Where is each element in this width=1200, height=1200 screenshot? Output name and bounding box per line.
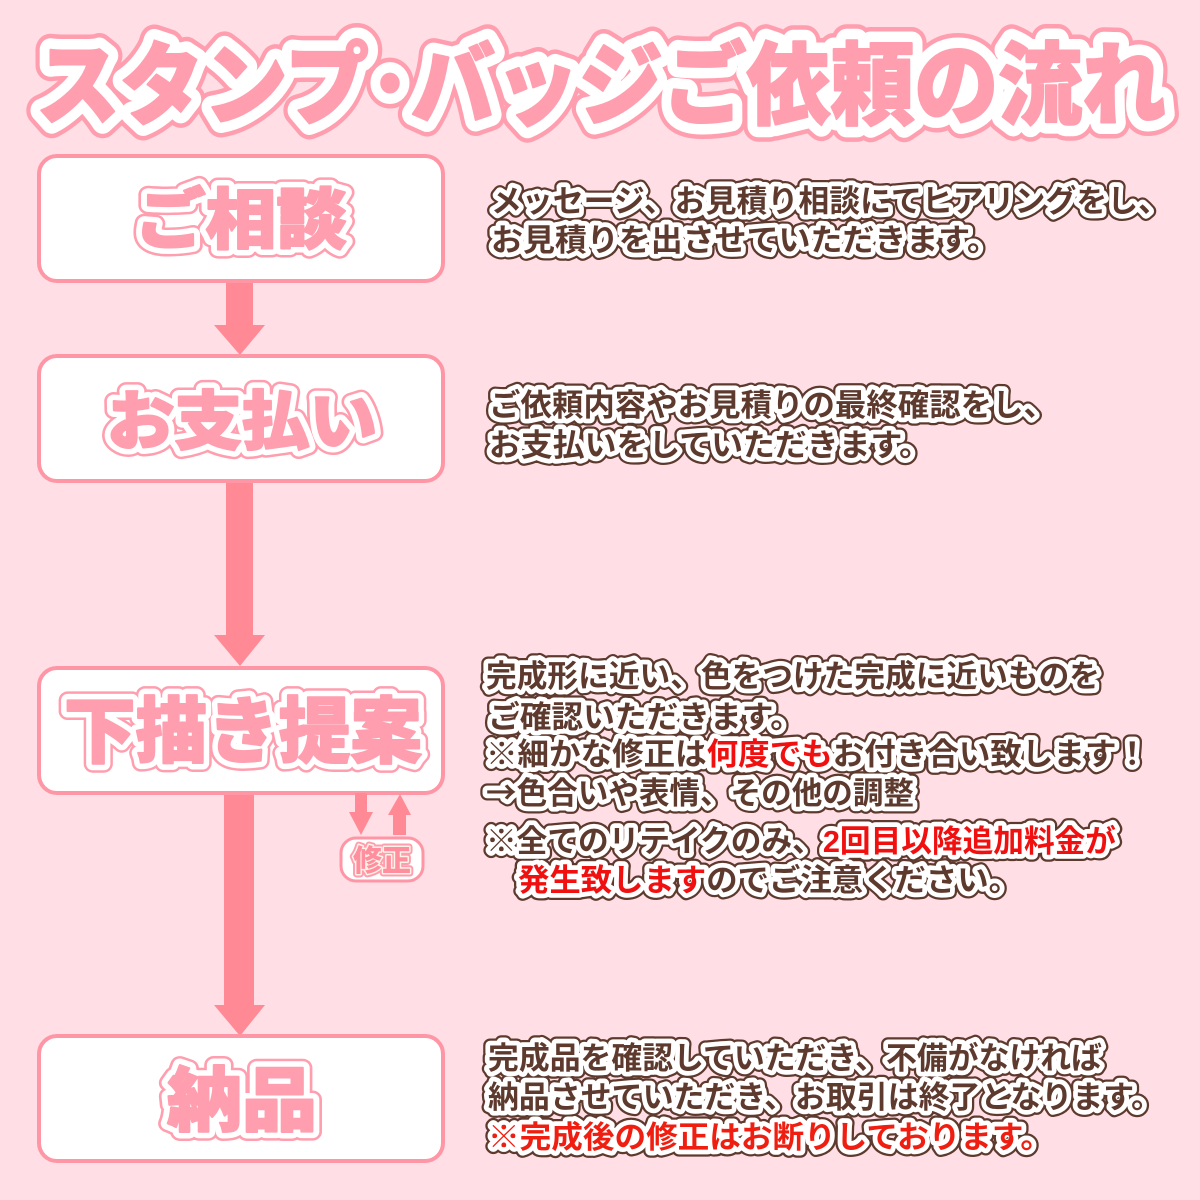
description: step 1: お見積りを出させていただきます。 (491, 223, 999, 258)
description: step 3: 発生致しますのでご注意ください。 (518, 863, 1020, 898)
description: step 4: 納品させていただき、お取引は終了となります。 (488, 1080, 1162, 1115)
revision label: 修正 (353, 845, 411, 878)
step 2 box: お支払い (39, 356, 443, 481)
step 1 box: ご相談 (39, 156, 443, 281)
arrow: down to revision (349, 793, 373, 835)
description: step 1: メッセージ、お見積り相談にてヒアリングをし、 (491, 184, 1169, 219)
step 1 label: ご相談 (135, 183, 347, 257)
revision badge: 修正 (341, 838, 423, 881)
description: step 2: お支払いをしていただきます。 (489, 428, 931, 463)
step 1 label: ご相談 (135, 183, 347, 257)
step 1 label: ご相談 (135, 183, 347, 257)
step 3 label: 下描き提案 (64, 693, 422, 773)
description: step 4: ※完成後の修正はお断りしております。 (488, 1120, 1052, 1155)
arrow: step 3 to step 4 (214, 793, 265, 1036)
description: step 1: お見積りを出させていただきます。 (491, 223, 999, 258)
step 3 label: 下描き提案 (64, 693, 422, 773)
description: step 3: ※細かな修正は何度でもお付き合い致します！ (486, 737, 1148, 772)
description: step 4: 納品させていただき、お取引は終了となります。 (488, 1080, 1162, 1115)
step 2 label: お支払い (107, 386, 377, 458)
description: step 3: ※全てのリテイクのみ、2回目以降追加料金が (486, 824, 1116, 859)
description: step 3: 完成形に近い、色をつけた完成に近いものを (486, 659, 1100, 694)
description: step 3: →色合いや表情、その他の調整 (486, 768, 914, 813)
description: step 1 (491, 184, 1169, 258)
description: step 3 (486, 659, 1148, 898)
step 4 box: 納品 (39, 1036, 443, 1161)
description: step 2: ご依頼内容やお見積りの最終確認をし、 (489, 388, 1055, 423)
description: step 4: 完成品を確認していただき、不備がなければ (488, 1041, 1102, 1076)
description: step 3: →色合いや表情、その他の調整 (486, 768, 914, 813)
step 3 box: 下描き提案 (39, 668, 443, 793)
description: step 3: ※細かな修正は何度でもお付き合い致します！ (486, 737, 1148, 772)
description: step 1: メッセージ、お見積り相談にてヒアリングをし、 (491, 184, 1169, 219)
description: step 3: ご確認いただきます。 (488, 700, 802, 735)
description: step 3: 発生致しますのでご注意ください。 (518, 863, 1020, 898)
step 4 label: 納品 (167, 1062, 317, 1140)
step 4 label: 納品 (167, 1062, 317, 1140)
description: step 2: ご依頼内容やお見積りの最終確認をし、 (489, 388, 1055, 423)
step 4 label: 納品 (167, 1062, 317, 1140)
step 3 label: 下描き提案 (64, 693, 422, 773)
description: step 3: ご確認いただきます。 (488, 700, 802, 735)
description: step 4: ※完成後の修正はお断りしております。 (488, 1120, 1052, 1155)
arrow: up from revision (388, 794, 411, 835)
description: step 4 (488, 1041, 1162, 1155)
arrow: step 1 to step 2 (214, 281, 265, 355)
description: step 3: 完成形に近い、色をつけた完成に近いものを (486, 659, 1100, 694)
step 2 label: お支払い (107, 386, 377, 458)
revision label: 修正 (353, 845, 411, 878)
step 2 label: お支払い (107, 386, 377, 458)
description: step 2: お支払いをしていただきます。 (489, 428, 931, 463)
description: step 3: ※全てのリテイクのみ、2回目以降追加料金が (486, 824, 1116, 859)
description: step 4: 完成品を確認していただき、不備がなければ (488, 1041, 1102, 1076)
description: step 2 (489, 388, 1055, 463)
arrow: step 2 to step 3 (214, 481, 265, 666)
